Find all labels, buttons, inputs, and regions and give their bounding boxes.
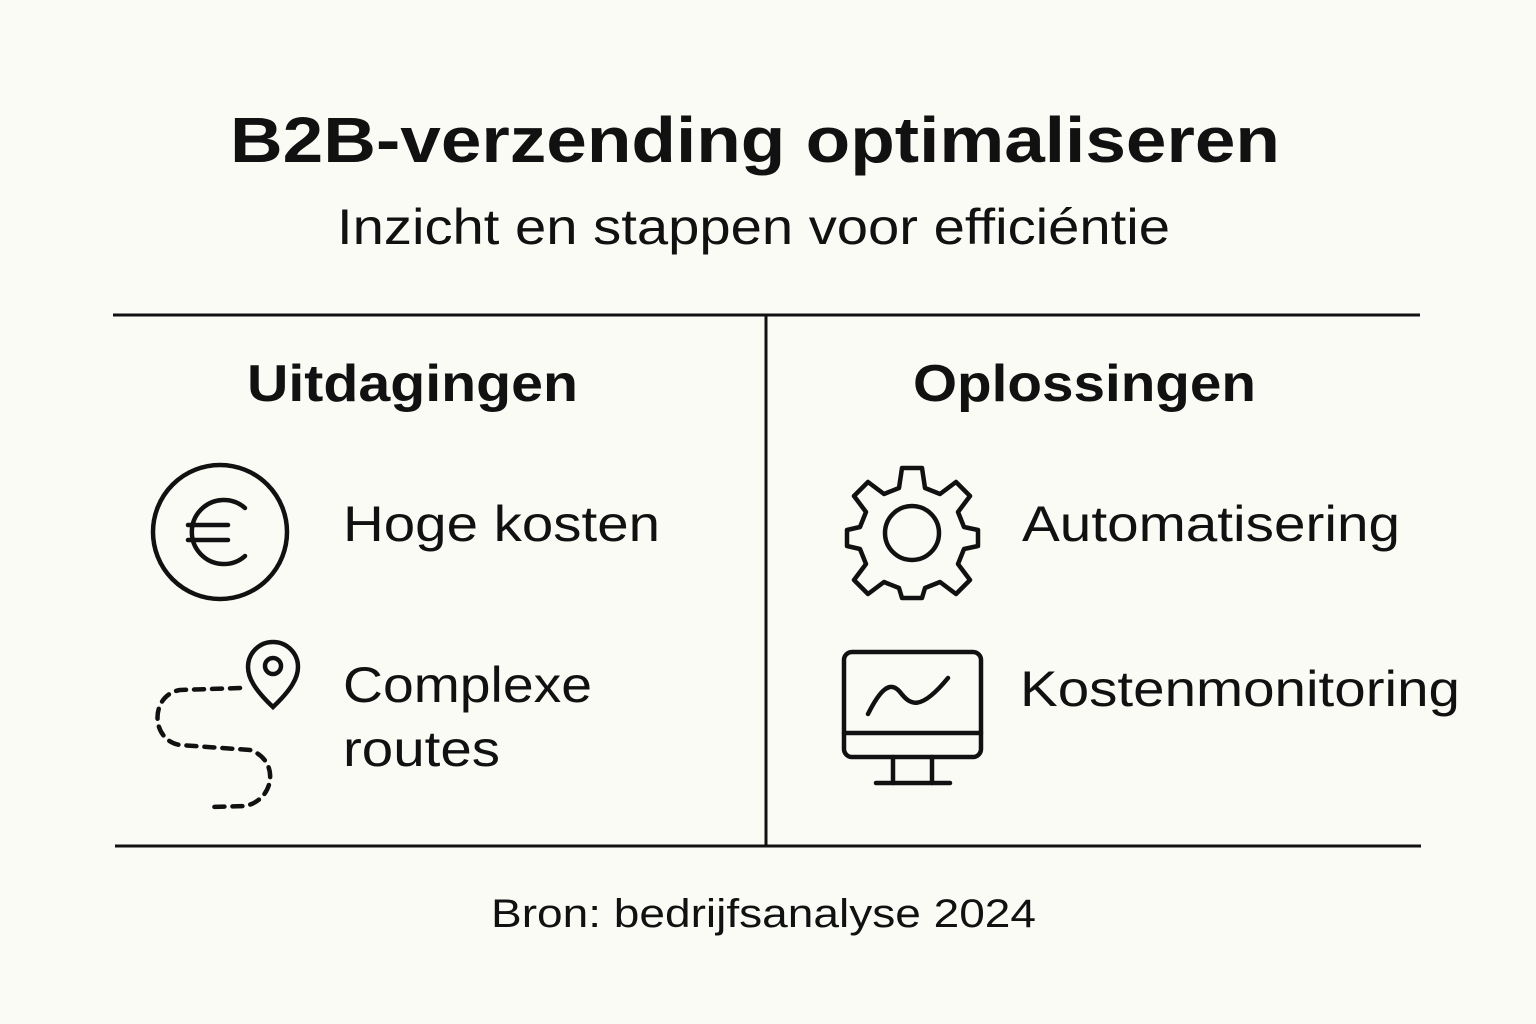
heading: Oplossingen: Oplossingen: [913, 355, 1256, 413]
icon: monitor: [844, 652, 981, 783]
heading: Uitdagingen: Uitdagingen: [247, 355, 578, 413]
icon: gear: [847, 468, 978, 598]
text: Automatisering: Automatisering: [1022, 496, 1400, 552]
text: Complexe routes: Complexe: [343, 657, 592, 713]
source: Bron: bedrijfsanalyse 2024: [491, 892, 1036, 936]
subtitle: Inzicht en stappen voor efficiéntie: [337, 199, 1170, 255]
panel: Uitdagingen: [153, 355, 660, 807]
text: Kostenmonitoring: Kostenmonitoring: [1020, 661, 1460, 717]
icon: euro: [153, 465, 287, 599]
panel: Uitdagingen: routes: [343, 721, 500, 777]
title: B2B-verzending optimaliseren: [230, 104, 1280, 176]
text: Hoge kosten: Hoge kosten: [343, 496, 660, 552]
icon: route with pin: [158, 642, 298, 807]
panel: Oplossingen: [844, 355, 1460, 783]
